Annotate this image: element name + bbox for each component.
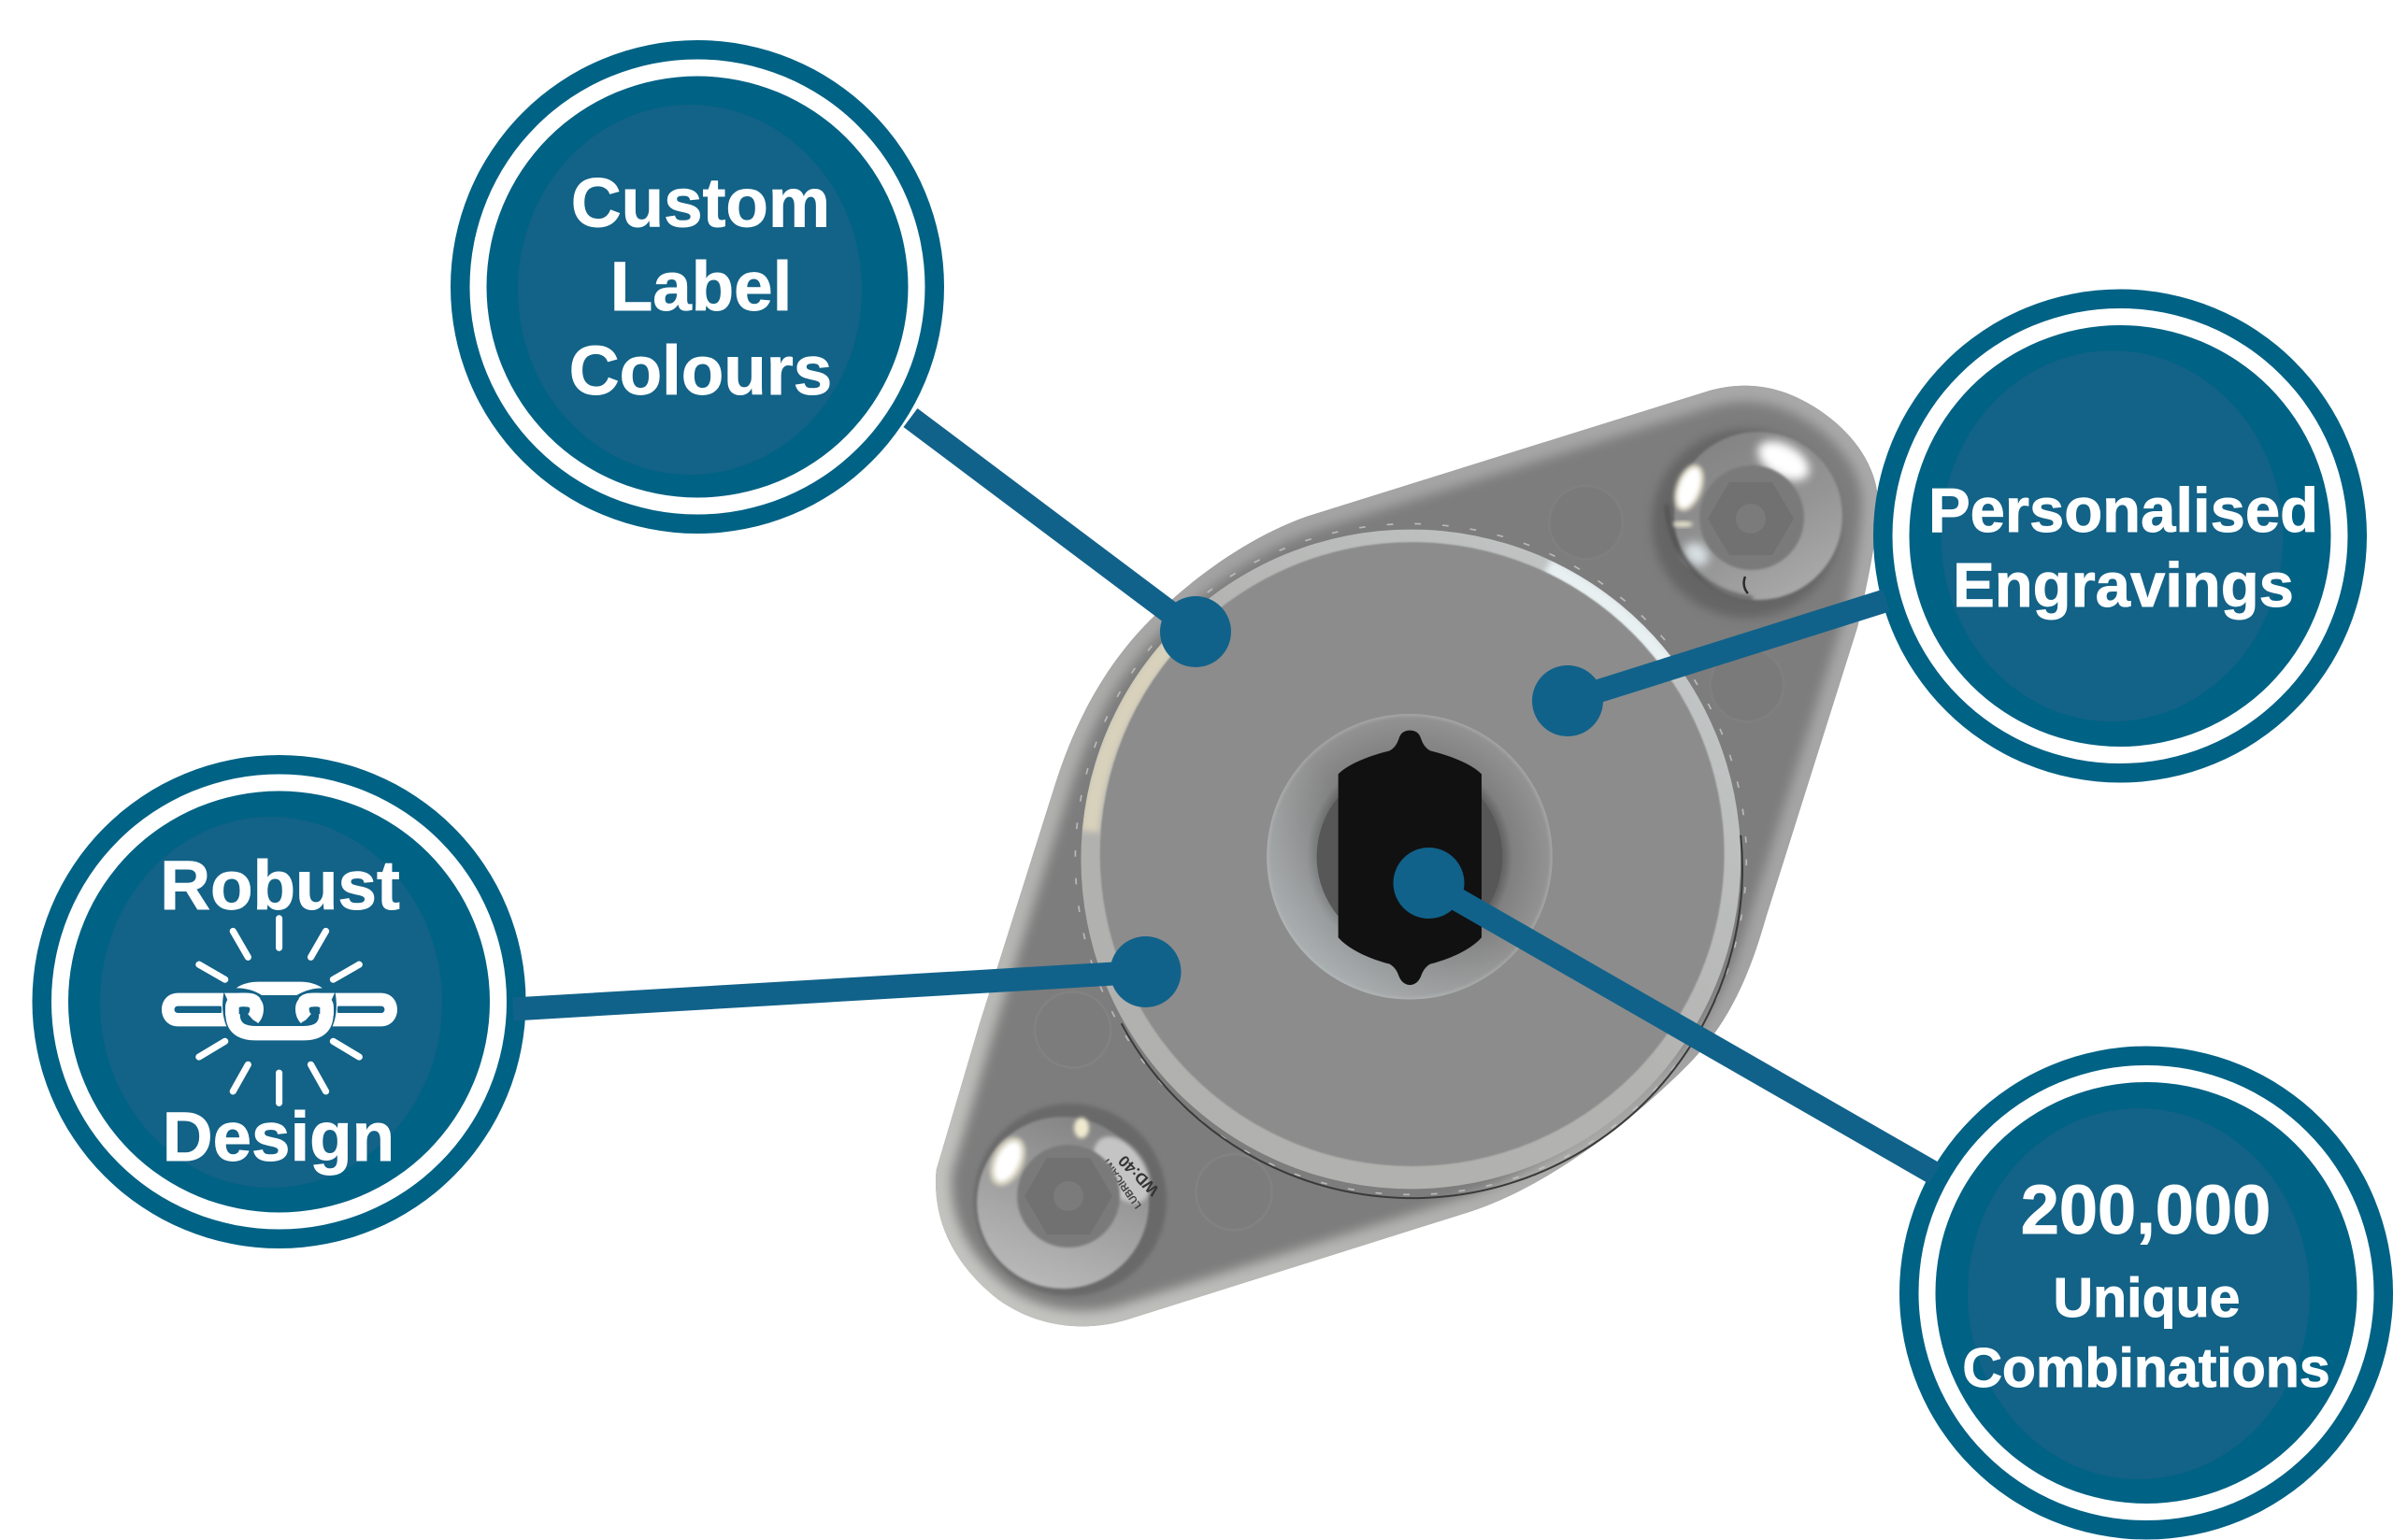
connector: 200,000 Unique Combinations to key slot: [1393, 848, 1935, 1174]
heading: Colours: [569, 332, 832, 409]
key slot: [1339, 731, 1482, 985]
engraved bolt lettering: LUBRICANT: [1100, 1155, 1144, 1210]
connector: Personalised Engravings to face: [1532, 600, 1886, 736]
callout: Custom Label Colours: [451, 40, 944, 534]
callout: 200,000 Unique Combinations: [1899, 1047, 2393, 1540]
heading: Design: Design: [163, 1098, 394, 1176]
heading: Personalised: [1928, 476, 2318, 546]
mounting plate: [916, 355, 1907, 1346]
heading: Engravings: [1953, 550, 2294, 620]
callout: Robust Design: [32, 755, 525, 1248]
engraved bolt lettering: WD:40: [1115, 1151, 1163, 1199]
engraved bolt lettering: [1100, 1151, 1163, 1210]
heading: Custom: [571, 164, 830, 241]
upper right bolt: [1652, 429, 1842, 618]
heading: [1928, 476, 2318, 620]
figure: 200,000: 200,000: [2021, 1171, 2271, 1248]
heading: Label: [610, 248, 792, 325]
heading: Robust: Robust: [160, 847, 400, 924]
connector: Custom Label Colours to label: [910, 418, 1231, 667]
heading: [569, 164, 832, 409]
product: lock plate and barrel: [916, 355, 1907, 1346]
caption: [1962, 1267, 2330, 1399]
lower left bolt: [974, 1104, 1167, 1296]
callout: Personalised Engravings: [1873, 290, 2367, 783]
connector: Robust Design to barrel: [513, 936, 1182, 1009]
caption: Combinations: [1962, 1337, 2330, 1399]
caption: Unique: [2054, 1267, 2240, 1329]
icon: strong chain link with rays: [162, 919, 397, 1103]
barrel disc with recess: [1081, 530, 1742, 1198]
